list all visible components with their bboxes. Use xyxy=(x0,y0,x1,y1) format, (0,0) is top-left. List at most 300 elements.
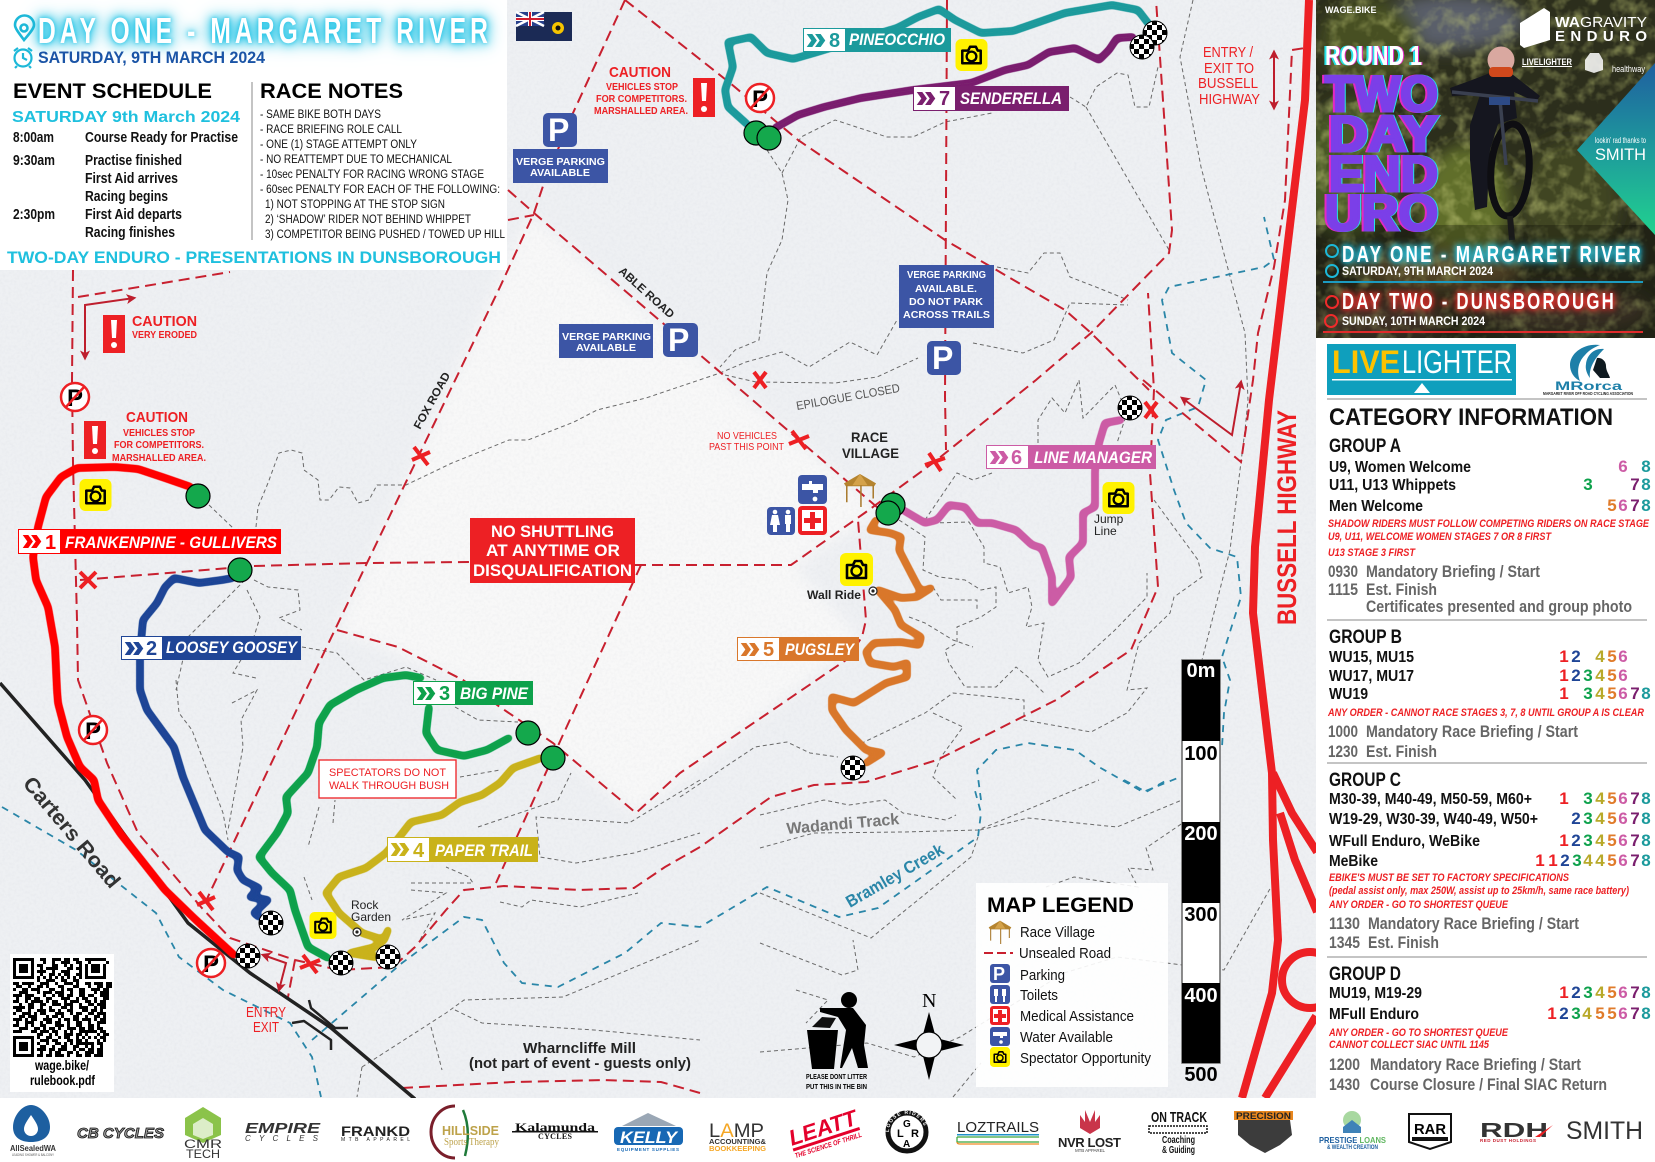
WA Gravity Enduro logo xyxy=(1520,8,1647,48)
LiveLighter logo: LIGHTER xyxy=(1402,344,1512,380)
group B: 1000 xyxy=(1328,723,1358,741)
group C: 8 xyxy=(1641,809,1651,828)
litter bin notice: PLEASE DONT LITTER xyxy=(806,1072,867,1081)
group B: 1 xyxy=(1559,666,1569,685)
group D: CANNOT COLLECT SIAC UNTIL 1145 xyxy=(1329,1039,1490,1051)
group D: 4 xyxy=(1582,1004,1592,1023)
road name labels: Wadandi Track xyxy=(786,811,900,838)
rock garden feature: Rock xyxy=(351,898,379,912)
sponsor: AllSealed WA: AllSealedWA xyxy=(10,1144,56,1153)
stage start dots xyxy=(186,121,905,770)
group C: 3 xyxy=(1583,809,1593,828)
group D xyxy=(1328,964,1651,1094)
group D: MU19, M19-29 xyxy=(1329,985,1422,1002)
sponsor: Lamp Accounting: LAMP xyxy=(709,1121,764,1142)
sponsor: Frank'd xyxy=(341,1123,410,1143)
verge parking sign 1: AVAILABLE xyxy=(530,167,590,179)
stage 5 label: 5 xyxy=(763,639,774,661)
schedule list: Racing finishes xyxy=(85,225,175,241)
wharncliffe mill note: Wharncliffe Mill xyxy=(523,1040,636,1057)
sponsor: Empire Cycles: CYCLES xyxy=(245,1134,319,1143)
sponsor: Smith: SMITH xyxy=(1566,1117,1643,1145)
verge parking sign 2: AVAILABLE xyxy=(576,342,636,354)
group B: 5 xyxy=(1607,684,1617,703)
group A: Mandatory Briefing / Start xyxy=(1366,563,1540,581)
road name labels: ABLE ROAD xyxy=(616,265,676,321)
sponsor: CMR Tech xyxy=(184,1107,222,1161)
group C: 1 xyxy=(1548,851,1558,870)
verge parking sign 2: P xyxy=(668,322,689,358)
QR code panel: rulebook.pdf xyxy=(30,1072,95,1088)
group C: 8 xyxy=(1641,831,1651,850)
entry / exit to Bussell Highway: ENTRY / xyxy=(1203,44,1254,61)
group B: WU19 xyxy=(1329,686,1368,703)
group D: 2 xyxy=(1559,1004,1569,1023)
verge parking sign 1 xyxy=(513,112,608,183)
unsealed roads xyxy=(72,0,1305,1093)
walking trails xyxy=(176,0,1271,1097)
stage 3 label: BIG PINE xyxy=(460,684,529,703)
caution: vehicles stop, left: CAUTION xyxy=(126,409,188,426)
group D: ANY ORDER - GO TO SHORTEST QUEUE xyxy=(1328,1027,1509,1039)
sponsor: Lamp Accounting: ACCOUNTING& xyxy=(709,1137,767,1146)
group A: 3 xyxy=(1583,475,1593,494)
scale bar: 0m xyxy=(1187,660,1215,682)
sponsor: NVR Lost: NVR LOST xyxy=(1058,1135,1121,1150)
group B: 4 xyxy=(1595,647,1605,666)
stage 6 label: 6 xyxy=(1011,447,1022,469)
sponsor logos strip xyxy=(0,1098,1643,1162)
race notes list: - ONE (1) STAGE ATTEMPT ONLY xyxy=(260,139,417,151)
sponsor: NVR Lost: MTB APPAREL xyxy=(1075,1148,1105,1153)
group B: 4 xyxy=(1595,684,1605,703)
sponsor: Precision xyxy=(1234,1111,1293,1153)
rock garden feature: Garden xyxy=(351,910,391,924)
sponsor: CMR Tech: CMR xyxy=(184,1137,222,1151)
sponsor: AllSealed WA xyxy=(10,1105,56,1157)
group B: 5 xyxy=(1607,666,1617,685)
sponsor: Hillside: Sports Therapy xyxy=(444,1137,499,1148)
sponsor: Lamp Accounting xyxy=(709,1121,767,1153)
partner logos: LIVELIGHTER xyxy=(1522,57,1572,67)
group B: 3 xyxy=(1583,666,1593,685)
stage 6 label xyxy=(986,445,1156,469)
group C: GROUP C xyxy=(1329,770,1401,791)
group C: 2 xyxy=(1571,831,1581,850)
sponsor: Precision: PRECISION xyxy=(1236,1111,1291,1121)
group C: 5 xyxy=(1607,831,1617,850)
sponsor: Leatt: LEATT xyxy=(786,1105,861,1151)
day two line: SUNDAY, 10TH MARCH 2024 xyxy=(1342,316,1486,328)
group C: ANY ORDER - GO TO SHORTEST QUEUE xyxy=(1328,899,1509,911)
icon: alarm clock xyxy=(14,48,32,68)
group D: 5 xyxy=(1595,1004,1605,1023)
MR Orca logo: MRorca xyxy=(1555,379,1622,393)
group C: 5 xyxy=(1607,809,1617,828)
group A: 7 xyxy=(1630,496,1640,515)
sponsor: NVR Lost xyxy=(1058,1110,1121,1153)
sponsor: Loose Riders: LOOSE RIDERS xyxy=(886,1110,927,1132)
group D: Course Closure / Final SIAC Return xyxy=(1370,1076,1607,1094)
caution: vehicles stop, top: VEHICLES STOP xyxy=(606,82,678,93)
group A: Est. Finish xyxy=(1366,581,1437,599)
jump line feature xyxy=(1094,512,1124,538)
no parking signs: P xyxy=(752,86,768,113)
no vehicles note xyxy=(709,430,784,453)
sponsor: On Track: ON TRACK xyxy=(1151,1109,1207,1126)
sponsor: Red Dust Holdings: RDH xyxy=(1480,1120,1548,1142)
group B: 6 xyxy=(1618,666,1628,685)
group B: 4 xyxy=(1595,666,1605,685)
no vehicles note: PAST THIS POINT xyxy=(709,441,784,453)
group B: 5 xyxy=(1607,647,1617,666)
site address: WAGE.BIKE xyxy=(1325,5,1377,15)
group B: Mandatory Race Briefing / Start xyxy=(1366,723,1578,741)
group A: U9, Women Welcome xyxy=(1329,459,1471,476)
sponsor: Prestige Loans: & WEALTH CREATION xyxy=(1327,1145,1378,1151)
caution: vehicles stop, top: FOR COMPETITORS. xyxy=(596,94,687,105)
right column panel background xyxy=(1316,338,1655,1162)
group A: 1115 xyxy=(1328,581,1358,599)
stage 6 label: LINE MANAGER xyxy=(1034,448,1153,467)
scale bar: 400 xyxy=(1184,985,1218,1007)
group D: 4 xyxy=(1595,983,1605,1002)
sponsor: Kalamunda Cycles: Kalamunda xyxy=(515,1120,595,1134)
group A: 6 xyxy=(1618,496,1628,515)
group A: 8 xyxy=(1641,457,1651,476)
litter bin notice: PUT THIS IN THE BIN xyxy=(806,1082,867,1091)
race village xyxy=(842,429,899,507)
group C: 6 xyxy=(1618,851,1628,870)
group A: 7 xyxy=(1630,475,1640,494)
verge parking sign 3: VERGE PARKING xyxy=(907,269,986,281)
schedule list: 2:30pm xyxy=(13,207,55,223)
schedule list: Racing begins xyxy=(85,189,168,205)
toilets icon xyxy=(767,507,795,535)
spectator camera icons xyxy=(80,39,1134,939)
sponsor: Red Dust Holdings: RED DUST HOLDINGS xyxy=(1480,1138,1536,1143)
map legend: MAP LEGEND xyxy=(987,894,1134,917)
jump line feature: Jump xyxy=(1094,512,1124,526)
group A: 6 xyxy=(1618,457,1628,476)
sponsor: Kelly Equipment xyxy=(614,1113,683,1152)
category information xyxy=(1327,404,1651,1094)
group C: MeBike xyxy=(1329,853,1378,870)
race notes list: - RACE BRIEFING ROLE CALL xyxy=(260,124,403,136)
poster photo background xyxy=(1300,0,1655,338)
group C: 6 xyxy=(1618,831,1628,850)
sponsor: Lamp Accounting: BOOKKEEPING xyxy=(709,1144,766,1153)
group A: 0930 xyxy=(1328,563,1358,581)
verge parking sign 1: P xyxy=(548,112,569,148)
creeks xyxy=(2,217,1274,1097)
group C: Est. Finish xyxy=(1368,934,1439,952)
no shuttling notice: AT ANYTIME OR xyxy=(486,541,620,560)
group C: 1345 xyxy=(1329,934,1360,952)
stage 2 label xyxy=(121,636,301,660)
two day enduro title: END xyxy=(1329,146,1438,202)
caution: vehicles stop, left: FOR COMPETITORS. xyxy=(114,440,204,451)
map legend: Toilets xyxy=(1020,987,1058,1004)
road name labels: EPILOGUE CLOSED xyxy=(795,381,901,413)
stage 4 label xyxy=(387,837,538,862)
category heading: CATEGORY INFORMATION xyxy=(1329,404,1613,431)
group C: 1 xyxy=(1535,851,1545,870)
caution: vehicles stop, top xyxy=(594,64,715,117)
state flag xyxy=(516,12,572,41)
race notes list: 3) COMPETITOR BEING PUSHED / TOWED UP HILL xyxy=(265,229,506,241)
rider on bike xyxy=(1450,46,1540,240)
no parking signs: P xyxy=(67,385,83,412)
race notes list xyxy=(260,109,506,241)
rock garden feature xyxy=(351,898,391,936)
sponsor: Loose Riders: G xyxy=(903,1119,911,1130)
sponsor: Loose Riders: L xyxy=(897,1128,904,1140)
spectators warning: SPECTATORS DO NOT xyxy=(329,767,446,779)
stage 5 label xyxy=(737,637,859,661)
Smith sponsor triangle xyxy=(1577,63,1655,235)
entry / exit to Bussell Highway: HIGHWAY xyxy=(1199,91,1260,108)
stage 1 route xyxy=(33,467,234,955)
group C xyxy=(1328,770,1651,952)
jump line feature: Line xyxy=(1094,524,1117,538)
stage 7 route xyxy=(775,37,1133,128)
MR Orca logo xyxy=(1543,345,1633,396)
race notes heading: RACE NOTES xyxy=(260,80,403,103)
group A: U11, U13 Whippets xyxy=(1329,477,1456,494)
no parking signs: P xyxy=(203,951,219,978)
group C: 5 xyxy=(1607,851,1617,870)
group C: 1130 xyxy=(1329,915,1360,933)
race village: VILLAGE xyxy=(842,445,899,461)
verge parking sign 3: AVAILABLE. xyxy=(915,283,977,295)
sponsor: RAR Suspension: RAR xyxy=(1414,1121,1446,1138)
entry / exit to Bussell Highway xyxy=(1198,44,1274,108)
group C: 2 xyxy=(1560,851,1570,870)
group C: WFull Enduro, WeBike xyxy=(1329,833,1480,850)
road name labels: FOX ROAD xyxy=(412,371,453,431)
stage 2 label: 2 xyxy=(146,638,157,660)
Smith sponsor triangle: SMITH xyxy=(1595,145,1646,164)
icon: location pin xyxy=(15,16,34,40)
stage 6 route xyxy=(903,420,1121,603)
map legend xyxy=(976,883,1168,1087)
sponsor: Prestige Loans xyxy=(1319,1111,1386,1151)
sponsor: Kelly Equipment: EQUIPMENT SUPPLIES xyxy=(617,1147,679,1152)
stage 5 route xyxy=(832,520,931,763)
schedule list: 9:30am xyxy=(13,153,55,169)
verge parking sign 2: VERGE PARKING xyxy=(562,331,651,343)
group D: 1 xyxy=(1559,983,1569,1002)
group B: 8 xyxy=(1641,684,1651,703)
stage 1 label: FRANKENPINE - GULLIVERS xyxy=(65,533,278,552)
group B: 2 xyxy=(1571,666,1581,685)
QR code panel xyxy=(10,954,114,1092)
group C: 6 xyxy=(1618,789,1628,808)
group C: 4 xyxy=(1595,831,1605,850)
sponsor: Red Dust Holdings xyxy=(1480,1120,1553,1143)
sponsor: Prestige Loans: PRESTIGE LOANS xyxy=(1319,1135,1386,1145)
presentations note: TWO-DAY ENDURO - PRESENTATIONS IN DUNSBOROUGH xyxy=(7,248,501,267)
group C: 8 xyxy=(1641,851,1651,870)
group C: 7 xyxy=(1630,831,1640,850)
stage 3 route xyxy=(426,707,509,756)
no parking signs: P xyxy=(85,718,101,745)
two day enduro title: DAY xyxy=(1329,106,1438,162)
group C: 3 xyxy=(1572,851,1582,870)
carters road entry exit: EXIT xyxy=(253,1019,279,1036)
water icon xyxy=(798,475,827,504)
no shuttling notice: NO SHUTTLING xyxy=(491,522,614,541)
event schedule heading: EVENT SCHEDULE xyxy=(13,80,212,103)
stage 8 label: 8 xyxy=(829,30,840,52)
group A: U13 STAGE 3 FIRST xyxy=(1328,547,1416,559)
highway access arrows xyxy=(1182,382,1241,435)
verge parking sign 3: P xyxy=(932,340,953,376)
caution: very eroded: CAUTION xyxy=(132,313,197,330)
schedule date: SATURDAY 9th March 2024 xyxy=(12,109,240,126)
group B: 6 xyxy=(1618,647,1628,666)
sponsor: RAR Suspension xyxy=(1409,1114,1451,1149)
entry / exit to Bussell Highway: EXIT TO xyxy=(1204,60,1254,77)
map legend: Race Village xyxy=(1020,924,1095,941)
sponsor: Loose Riders xyxy=(886,1110,928,1154)
scale bar: 300 xyxy=(1184,904,1218,926)
group C: 4 xyxy=(1595,789,1605,808)
sponsor: Empire Cycles xyxy=(245,1120,321,1143)
partner logos: healthway xyxy=(1612,64,1645,74)
entry / exit to Bussell Highway: BUSSELL xyxy=(1198,75,1258,92)
group B: 2 xyxy=(1571,647,1581,666)
stage 3 label xyxy=(413,681,533,705)
Carters Road line and bridge xyxy=(0,683,415,1099)
sponsor: Empire Cycles: EMPIRE xyxy=(245,1120,321,1137)
stage 5 label: PUGSLEY xyxy=(785,640,855,659)
group C: 4 xyxy=(1583,851,1593,870)
stage 4 label: 4 xyxy=(413,840,425,862)
no vehicles note: NO VEHICLES xyxy=(717,430,777,442)
sponsor: On Track: & Guiding xyxy=(1162,1145,1195,1156)
caution: vehicles stop, top: MARSHALLED AREA. xyxy=(594,106,688,117)
verge parking sign 2 xyxy=(559,322,698,358)
stage 3 route continuation xyxy=(259,675,421,958)
stage finish flags xyxy=(236,21,1167,975)
group C: W19-29, W30-39, W40-49, W50+ xyxy=(1329,811,1538,828)
caution: vehicles stop, left: MARSHALLED AREA. xyxy=(112,453,206,464)
sponsor: AllSealed WA: LEADING SHOWER & BALCONY xyxy=(12,1153,55,1157)
group B: Est. Finish xyxy=(1366,743,1437,761)
group D: 3 xyxy=(1571,1004,1581,1023)
sponsor: Loztrails xyxy=(957,1119,1039,1144)
group B: WU17, MU17 xyxy=(1329,668,1414,685)
road name labels xyxy=(18,265,948,911)
sponsor: CB Cycles: CB CYCLES xyxy=(77,1125,164,1142)
group A: Men Welcome xyxy=(1329,498,1423,515)
day one heading: DAY ONE - MARGARET RIVER xyxy=(38,10,492,51)
wall ride feature: Wall Ride xyxy=(807,588,861,602)
verge parking sign 3: DO NOT PARK xyxy=(909,296,983,308)
stage 7 label xyxy=(913,86,1069,111)
group A: 8 xyxy=(1641,496,1651,515)
map legend: Parking xyxy=(1020,967,1065,984)
day one line: SATURDAY, 9TH MARCH 2024 xyxy=(1342,266,1494,278)
no shuttling notice xyxy=(470,518,635,583)
stage 8 label xyxy=(803,28,951,52)
sponsor: CMR Tech: TECH xyxy=(186,1147,220,1161)
group D: 8 xyxy=(1641,983,1651,1002)
race notes list: - NO REATTEMPT DUE TO MECHANICAL xyxy=(260,154,453,166)
WA Gravity Enduro logo: WAGRAVITY xyxy=(1555,14,1647,31)
spectators warning: WALK THROUGH BUSH xyxy=(329,780,449,792)
sponsor: Leatt: THE SCIENCE OF THRILL xyxy=(794,1132,863,1160)
group D: Mandatory Race Briefing / Start xyxy=(1370,1056,1581,1074)
sponsor: Frank'd: FRANKD xyxy=(341,1123,410,1139)
group D: 8 xyxy=(1641,1004,1651,1023)
group D: 5 xyxy=(1607,1004,1617,1023)
stage 8 route xyxy=(725,5,1151,125)
round heading: ROUND 1 xyxy=(1325,40,1422,71)
poster xyxy=(1300,0,1655,338)
partner logos xyxy=(1522,53,1645,74)
group C: 4 xyxy=(1595,809,1605,828)
group C: 3 xyxy=(1583,831,1593,850)
race notes list: 2) ‘SHADOW’ RIDER NOT BEHIND WHIPPET xyxy=(265,214,471,226)
caution: vehicles stop, left xyxy=(84,409,206,464)
schedule list: Practise finished xyxy=(85,153,182,169)
sponsor: Loose Riders: A xyxy=(903,1139,910,1150)
race notes list: - 60sec PENALTY FOR EACH OF THE FOLLOWING: xyxy=(260,184,500,196)
two day enduro title xyxy=(1325,66,1438,241)
no parking signs xyxy=(61,84,774,978)
two day enduro title: URO xyxy=(1325,185,1438,241)
caution: vehicles stop, top: CAUTION xyxy=(609,64,671,81)
medical icon xyxy=(798,506,827,535)
stage 2 route xyxy=(140,578,268,917)
WA Gravity Enduro logo: ENDURO xyxy=(1555,28,1647,45)
caution: vehicles stop, left: VEHICLES STOP xyxy=(123,428,195,439)
schedule list: First Aid departs xyxy=(85,207,182,223)
group D: 2 xyxy=(1571,983,1581,1002)
map legend: P xyxy=(993,964,1005,984)
stage 4 label: PAPER TRAIL xyxy=(435,841,533,860)
group B: WU15, MU15 xyxy=(1329,649,1414,666)
verge parking sign 3 xyxy=(899,265,994,376)
group C: EBIKE'S MUST BE SET TO FACTORY SPECIFICATIONS xyxy=(1329,872,1570,884)
highway label: BUSSELL HIGHWAY xyxy=(1272,410,1302,625)
north compass xyxy=(894,990,964,1080)
sponsor: Kalamunda Cycles: CYCLES xyxy=(538,1132,573,1141)
day two line xyxy=(1323,288,1643,333)
sponsor: Kalamunda Cycles xyxy=(512,1120,598,1141)
schedule list xyxy=(13,130,238,241)
road name labels: Bramley Creek xyxy=(842,840,948,911)
group D: 6 xyxy=(1618,983,1628,1002)
group B: 1 xyxy=(1559,647,1569,666)
wharncliffe mill note xyxy=(469,1040,691,1072)
group D: GROUP D xyxy=(1329,964,1401,985)
race notes list: - SAME BIKE BOTH DAYS xyxy=(260,109,381,121)
group D: 1430 xyxy=(1329,1076,1360,1094)
north compass: N xyxy=(922,990,936,1012)
stage 7 label: SENDERELLA xyxy=(960,89,1062,108)
group C: 1 xyxy=(1559,789,1569,808)
group D: 1 xyxy=(1547,1004,1557,1023)
scale bar: 100 xyxy=(1184,743,1218,765)
stage 3 label: 3 xyxy=(439,683,450,705)
group C: 3 xyxy=(1583,789,1593,808)
group C: Mandatory Race Briefing / Start xyxy=(1368,915,1579,933)
caution: very eroded xyxy=(85,298,197,358)
